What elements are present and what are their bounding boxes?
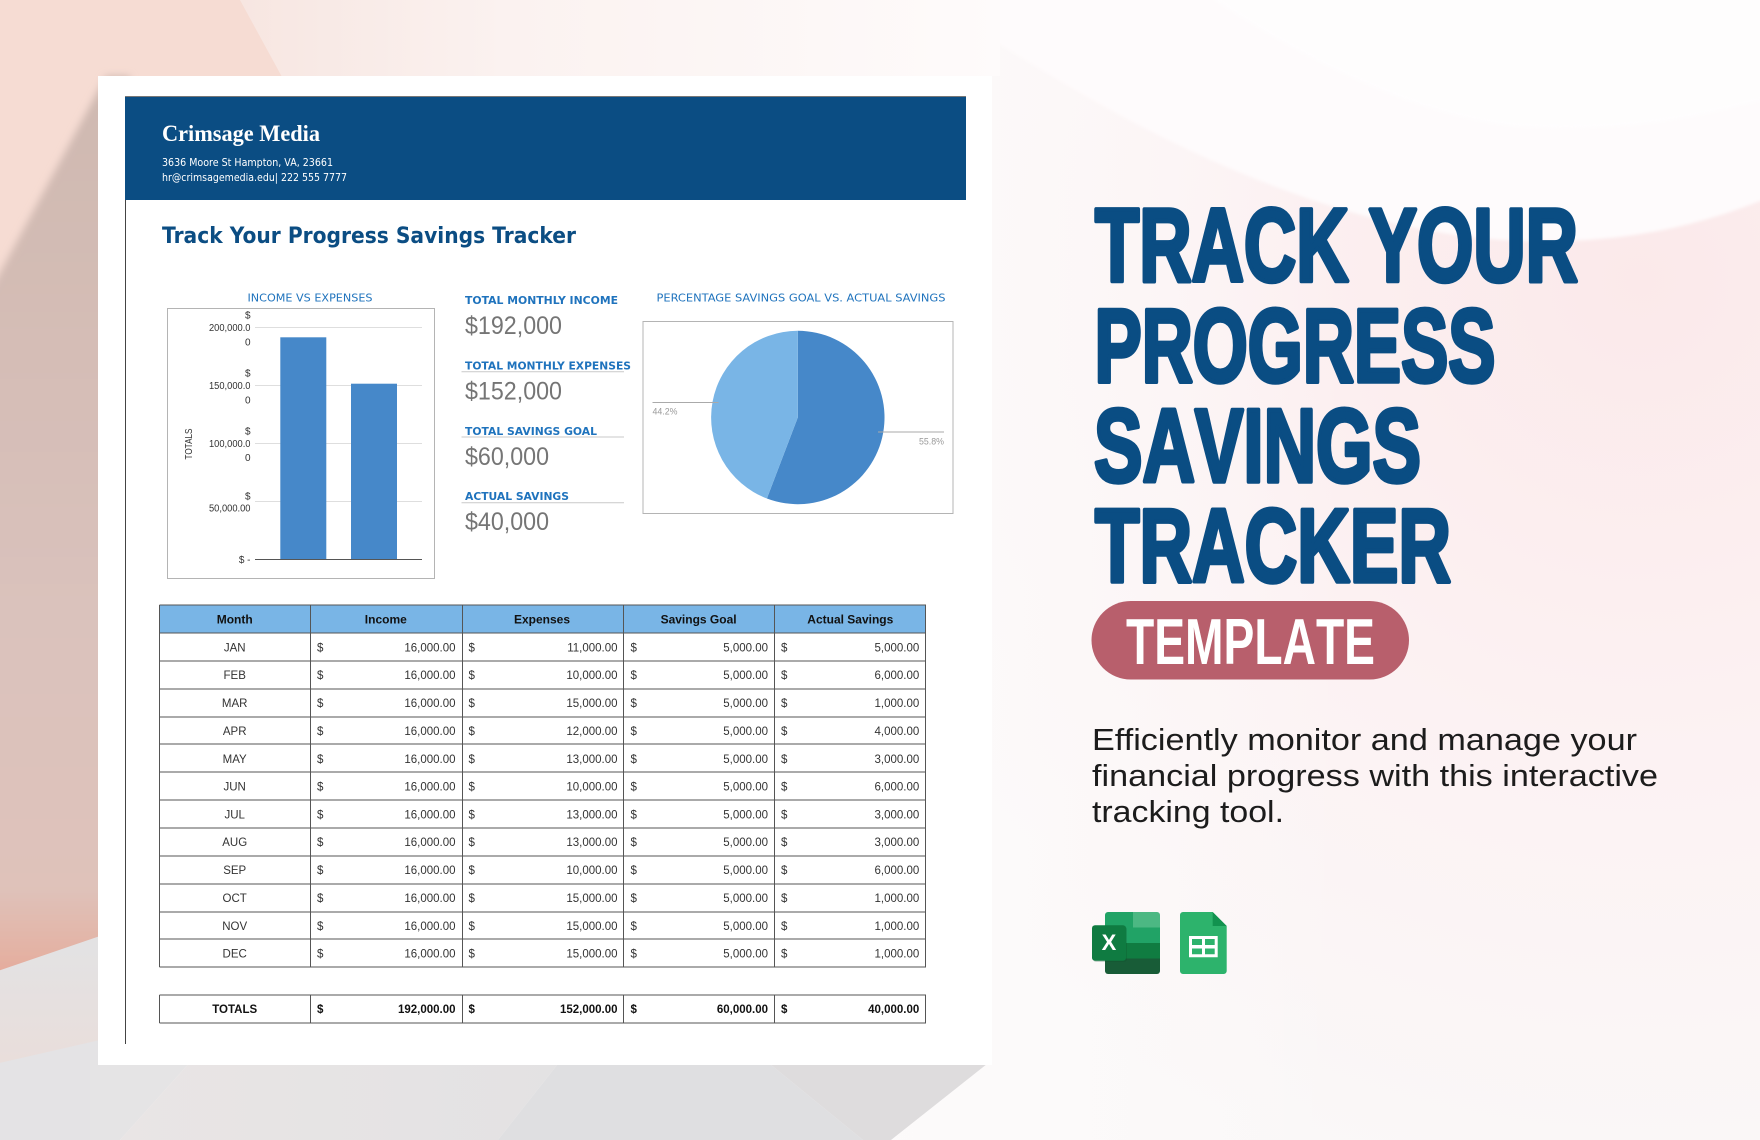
row NOV: 1,000.00 [875, 921, 919, 933]
row APR: $ [468, 726, 476, 738]
row DEC: $ [781, 949, 788, 961]
row MAY: $ [630, 754, 638, 766]
row APR: $ [630, 726, 638, 738]
row MAR: 15,000.00 [566, 698, 618, 710]
icon: excel: X [1102, 930, 1117, 955]
main heading: PROGRESS [1094, 288, 1496, 404]
totals row [212, 1004, 919, 1016]
y axis labels: 100,000.0 [209, 439, 251, 450]
totals row: $ [781, 1004, 788, 1016]
row MAY: $ [781, 754, 788, 766]
row SEP: 10,000.00 [566, 865, 618, 877]
table header row: Month [217, 612, 253, 626]
description text: Efficiently monitor and manage your [1092, 722, 1637, 757]
row SEP: SEP [223, 865, 247, 877]
chart title: INCOME VS EXPENSES [248, 292, 373, 304]
kpi: total monthly expenses: TOTAL MONTHLY EXPENSES [465, 360, 631, 372]
y axis labels: 150,000.0 [209, 381, 251, 392]
row AUG: $ [630, 837, 638, 849]
row FEB: FEB [224, 670, 246, 682]
row AUG: $ [468, 837, 476, 849]
row DEC: $ [630, 949, 638, 961]
row NOV: $ [630, 921, 638, 933]
row JAN [224, 642, 919, 654]
y axis labels: 0 [245, 453, 251, 464]
document title: Track Your Progress Savings Tracker [162, 224, 576, 249]
row MAY: $ [317, 754, 324, 766]
totals row: TOTALS [212, 1004, 257, 1016]
row JUL: 16,000.00 [404, 809, 456, 821]
row OCT: 1,000.00 [875, 893, 919, 905]
totals row: 152,000.00 [560, 1004, 618, 1016]
row DEC: 16,000.00 [404, 949, 456, 961]
row MAY: 16,000.00 [404, 754, 456, 766]
main heading: SAVINGS [1094, 388, 1421, 504]
row JUL: $ [781, 809, 788, 821]
row JUN: $ [630, 782, 638, 794]
pie chart: savings goal vs actual [643, 292, 953, 514]
row MAR: $ [781, 698, 788, 710]
row FEB: $ [468, 670, 476, 682]
row SEP: 16,000.00 [404, 865, 456, 877]
table header row: Income [365, 612, 407, 626]
icon: excel [1092, 912, 1160, 974]
row SEP: $ [468, 865, 476, 877]
row FEB: 5,000.00 [723, 670, 768, 682]
row MAR: $ [317, 698, 324, 710]
totals row: 40,000.00 [868, 1004, 919, 1016]
row AUG: AUG [222, 837, 247, 849]
monthly table [160, 605, 926, 1023]
template pill [1092, 601, 1409, 680]
kpi: total monthly income [465, 294, 618, 340]
row AUG: 5,000.00 [723, 837, 768, 849]
row AUG: 16,000.00 [404, 837, 456, 849]
row MAR: $ [630, 698, 638, 710]
row SEP: 5,000.00 [723, 865, 768, 877]
row OCT: 15,000.00 [566, 893, 618, 905]
kpi: total savings goal: TOTAL SAVINGS GOAL [465, 425, 597, 438]
row JUL: 5,000.00 [723, 809, 768, 821]
row JUN [224, 782, 919, 794]
row OCT: $ [468, 893, 476, 905]
row APR: 16,000.00 [404, 726, 456, 738]
y axis title: TOTALS [184, 428, 195, 460]
row DEC: 5,000.00 [723, 949, 768, 961]
row JUN: $ [317, 782, 324, 794]
row FEB: $ [630, 670, 638, 682]
row DEC [223, 949, 919, 961]
row MAY [223, 754, 919, 766]
y axis labels: 0 [245, 396, 251, 406]
row DEC: 1,000.00 [875, 949, 919, 961]
row NOV: NOV [222, 921, 247, 933]
kpi: total monthly income: TOTAL MONTHLY INCOME [465, 294, 618, 307]
row FEB: $ [317, 670, 324, 682]
bar chart: income vs expenses [168, 292, 434, 578]
row MAY: 3,000.00 [875, 754, 919, 766]
y axis labels: 200,000.0 [209, 323, 251, 334]
row OCT: OCT [223, 893, 247, 905]
row APR: 12,000.00 [566, 726, 618, 738]
income bar [280, 337, 326, 559]
kpi: total monthly expenses: $152,000 [465, 378, 562, 406]
row JAN: 5,000.00 [723, 642, 768, 654]
row FEB: 10,000.00 [566, 670, 618, 682]
row MAR: $ [468, 698, 476, 710]
totals row: $ [468, 1004, 476, 1016]
row OCT: $ [630, 893, 638, 905]
totals row: $ [630, 1004, 638, 1016]
row JUN: $ [468, 782, 476, 794]
table header row: Actual Savings [807, 612, 894, 626]
row OCT: 5,000.00 [723, 893, 768, 905]
row NOV: $ [317, 921, 324, 933]
pie slice 55.8 percent [767, 331, 885, 504]
row NOV [222, 921, 919, 933]
template pill: TEMPLATE [1126, 605, 1375, 678]
row JUN: $ [781, 782, 788, 794]
description text [1092, 722, 1658, 829]
row MAR: 1,000.00 [875, 698, 919, 710]
row JUL [224, 809, 919, 821]
row JUL: $ [630, 809, 638, 821]
kpi: total savings goal [462, 425, 624, 471]
row JAN: $ [317, 642, 324, 654]
row JAN: 16,000.00 [404, 642, 456, 654]
pie label 44.2: 44.2% [652, 406, 678, 418]
description text: tracking tool. [1092, 794, 1284, 829]
pie label 55.8: 55.8% [919, 436, 945, 448]
y axis labels: $ [245, 310, 251, 322]
row JUL: $ [317, 809, 324, 821]
row MAR: 16,000.00 [404, 698, 456, 710]
row FEB: 6,000.00 [875, 670, 919, 682]
row NOV: 15,000.00 [566, 921, 618, 933]
y axis labels: $ [245, 492, 251, 502]
y axis labels: $ - [239, 555, 250, 566]
main heading [1094, 188, 1578, 604]
row JAN: 11,000.00 [567, 642, 618, 654]
row APR: $ [317, 726, 324, 738]
row MAY: 13,000.00 [566, 754, 618, 766]
row DEC: $ [468, 949, 476, 961]
row OCT [223, 893, 919, 905]
document header band [125, 96, 966, 200]
row AUG: $ [317, 837, 324, 849]
row APR: 4,000.00 [875, 726, 919, 738]
company name: Crimsage Media [162, 121, 320, 146]
row JUN: 16,000.00 [404, 782, 456, 794]
row JUL: $ [468, 809, 476, 821]
row JUN: JUN [224, 782, 246, 794]
main heading: TRACKER [1095, 488, 1451, 604]
row JUL: 13,000.00 [566, 809, 618, 821]
row AUG [222, 837, 919, 849]
totals row: $ [317, 1004, 324, 1016]
document paper [98, 76, 992, 1065]
row MAY: 5,000.00 [723, 754, 768, 766]
row DEC: $ [317, 949, 324, 961]
y axis labels: 0 [245, 338, 251, 348]
row OCT: $ [317, 893, 324, 905]
row FEB: $ [781, 670, 788, 682]
company address: 3636 Moore St Hampton, VA, 23661 [162, 156, 333, 169]
row MAR: MAR [222, 698, 247, 710]
row APR [223, 726, 919, 738]
row JUN: 6,000.00 [875, 782, 919, 794]
description text: financial progress with this interactive [1092, 758, 1658, 793]
pie slice 44.2 percent [711, 331, 798, 498]
chart title: PERCENTAGE SAVINGS GOAL VS. ACTUAL SAVINGS [656, 292, 946, 304]
table header row: Expenses [514, 612, 570, 626]
totals row: 60,000.00 [717, 1004, 768, 1016]
row SEP: $ [781, 865, 788, 877]
totals row: 192,000.00 [398, 1004, 456, 1016]
pie label 55.8 [878, 432, 945, 448]
row APR: 5,000.00 [723, 726, 768, 738]
row APR: APR [223, 726, 247, 738]
y axis labels [209, 310, 251, 566]
row JUN: 10,000.00 [566, 782, 618, 794]
row APR: $ [781, 726, 788, 738]
y axis labels: $ [245, 426, 251, 438]
table header row [160, 605, 926, 634]
row DEC: 15,000.00 [566, 949, 618, 961]
pie label 44.2 [652, 402, 718, 418]
row MAY: $ [468, 754, 476, 766]
row AUG: 3,000.00 [875, 837, 919, 849]
row NOV: 16,000.00 [404, 921, 456, 933]
row NOV: 5,000.00 [723, 921, 768, 933]
row JAN: $ [781, 642, 788, 654]
kpi: actual savings [462, 490, 624, 536]
row JAN: 5,000.00 [875, 642, 919, 654]
row AUG: 13,000.00 [566, 837, 618, 849]
row JUL: 3,000.00 [875, 809, 919, 821]
row JUN: 5,000.00 [723, 782, 768, 794]
expenses bar [351, 384, 397, 559]
kpi: actual savings: ACTUAL SAVINGS [465, 490, 569, 503]
row DEC: DEC [223, 949, 247, 961]
row FEB: 16,000.00 [404, 670, 456, 682]
y axis labels: $ [245, 368, 251, 380]
row MAY: MAY [223, 754, 247, 766]
row JUL: JUL [224, 809, 246, 821]
kpi: total monthly expenses [462, 360, 631, 406]
row NOV: $ [781, 921, 788, 933]
icon: google sheets [1180, 912, 1227, 974]
y axis labels: 50,000.00 [209, 504, 251, 514]
kpi: total monthly income: $192,000 [465, 312, 562, 340]
row SEP: $ [630, 865, 638, 877]
table header row: Savings Goal [661, 612, 737, 626]
row SEP [223, 865, 919, 877]
kpi: total savings goal: $60,000 [465, 443, 549, 471]
row JAN: $ [630, 642, 638, 654]
row SEP: 6,000.00 [875, 865, 919, 877]
row OCT: 16,000.00 [404, 893, 456, 905]
row NOV: $ [468, 921, 476, 933]
row JAN: JAN [224, 642, 246, 654]
row AUG: $ [781, 837, 788, 849]
kpi: actual savings: $40,000 [465, 508, 549, 536]
row FEB [224, 670, 919, 682]
row OCT: $ [781, 893, 788, 905]
company contact: hr@crimsagemedia.edu| 222 555 7777 [162, 171, 347, 184]
row JAN: $ [468, 642, 476, 654]
row MAR [222, 698, 919, 710]
row MAR: 5,000.00 [723, 698, 768, 710]
row SEP: $ [317, 865, 324, 877]
